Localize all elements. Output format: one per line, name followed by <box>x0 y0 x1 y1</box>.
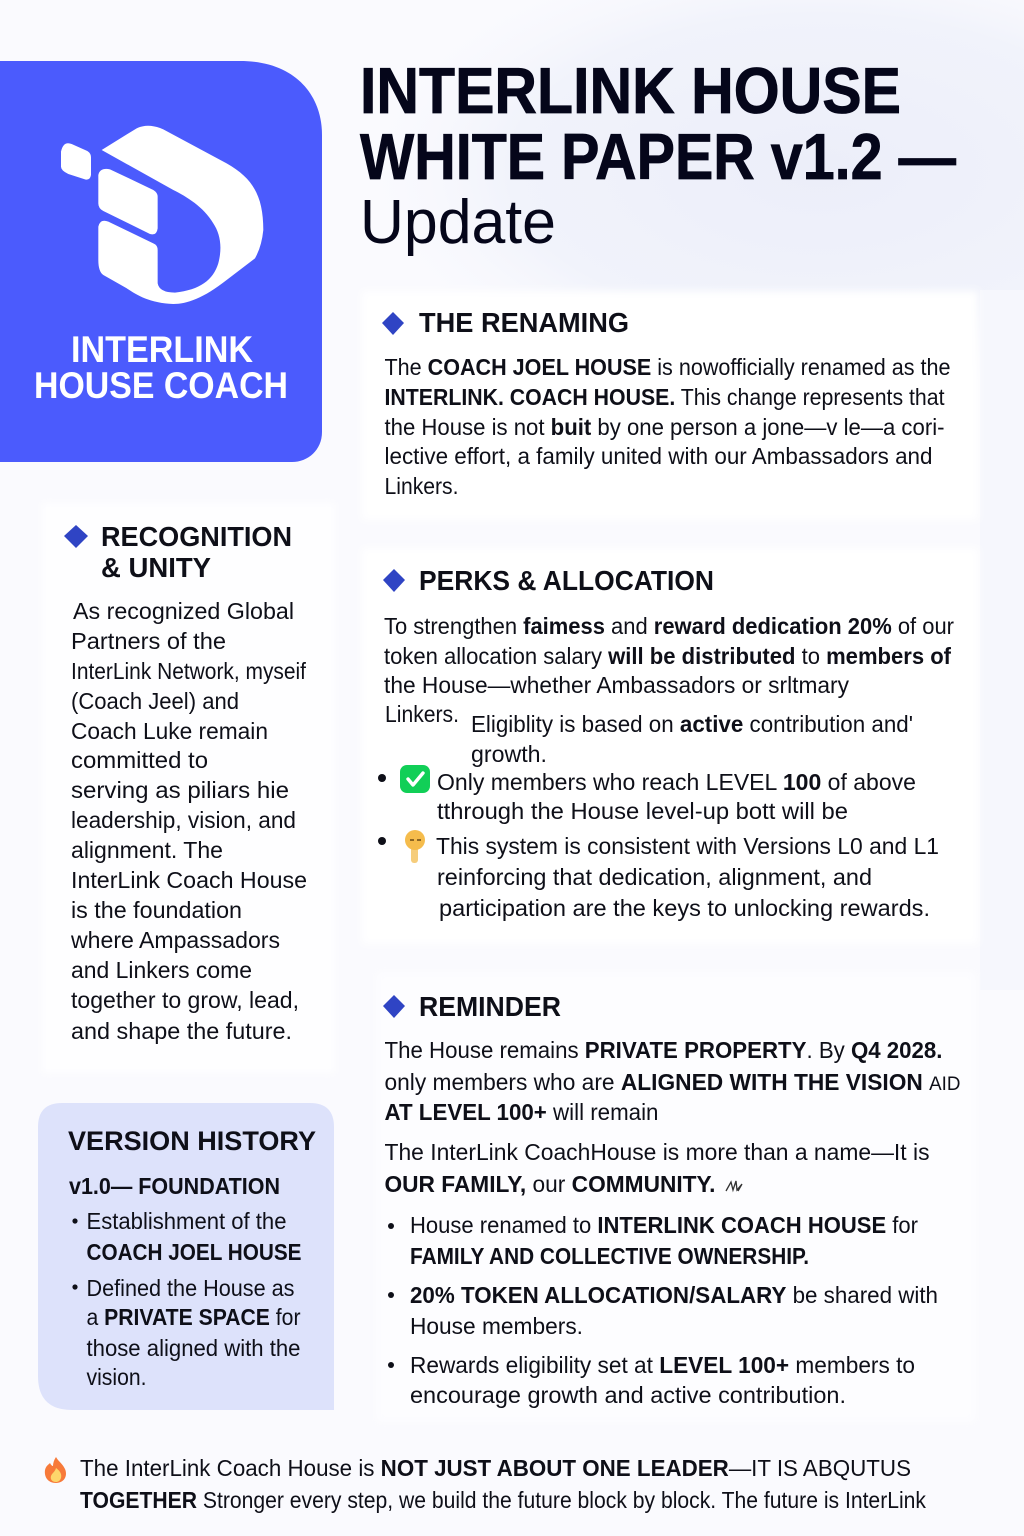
text: perks body: Linkers. <box>385 701 459 727</box>
footer callout <box>45 1455 926 1513</box>
list: version items: a PRIVATE SPACE for <box>86 1304 301 1330</box>
text: recognition body: together to grow, lead, <box>71 987 299 1013</box>
text: perks body: To strengthen faimess and reward dedication 20% of our <box>384 613 954 639</box>
icon: green check <box>400 765 430 793</box>
text: recognition body: (Coach Jeel) and <box>71 688 239 714</box>
icon: diamond bullet <box>383 995 405 1018</box>
text: recognition body <box>70 598 307 1044</box>
text: renaming body: lective effort, a family united with our Ambassadors and <box>384 443 932 469</box>
text: perks body: the House—whether Ambassadors or srltmary <box>384 672 849 698</box>
text: renaming body: The COACH JOEL HOUSE is nowofficially renamed as the <box>384 354 950 380</box>
list: version items: those aligned with the <box>86 1335 300 1361</box>
panel: the renaming background <box>362 291 978 520</box>
heading: version history: VERSION HISTORY <box>68 1126 316 1156</box>
panel: perks and allocation <box>378 565 954 921</box>
list: reminder summary: House renamed to INTERLINK COACH HOUSE for <box>410 1212 918 1238</box>
bullet: level 100 <box>378 765 916 824</box>
panel: recognition and unity <box>64 521 307 1044</box>
logo name: HOUSE COACH <box>34 365 288 406</box>
list: reminder summary: Rewards eligibility set at LEVEL 100+ members to <box>410 1352 915 1378</box>
text: reminder body: only members who are ALIGNED WITH THE VISION AID <box>384 1069 960 1095</box>
text: recognition body: committed to <box>71 747 208 773</box>
logo name: INTERLINK <box>71 329 253 370</box>
text: reminder body: The House remains PRIVATE PROPERTY. By Q4 2028. <box>384 1037 942 1063</box>
list: version items: Defined the House as <box>86 1275 294 1301</box>
text: reminder body: AT LEVEL 100+ will remain <box>384 1099 658 1125</box>
icon: key <box>405 830 425 863</box>
text: recognition body: As recognized Global <box>73 598 294 624</box>
text: reminder body: The InterLink CoachHouse is more than a name—It is <box>384 1139 930 1165</box>
text: recognition body: InterLink Coach House <box>71 867 307 893</box>
icon: diamond bullet <box>382 312 404 335</box>
list: reminder summary: encourage growth and active contribution. <box>410 1382 846 1408</box>
panel: reminder background <box>376 972 976 1422</box>
text: recognition body: alignment. The <box>71 837 223 863</box>
bullet: consistency: reinforcing that dedication, alignment, and <box>437 864 872 890</box>
text: perks body: growth. <box>471 741 547 767</box>
text: renaming body: the House is not buit by one person a jone—v le—a cori- <box>384 414 944 440</box>
heading: the renaming: THE RENAMING <box>419 307 629 338</box>
bullet: level 100: tthrough the House level-up bott will be <box>437 798 848 824</box>
panel: logo card <box>0 61 322 462</box>
text: recognition body: where Ampassadors <box>70 927 280 953</box>
text: recognition body: and shape the future. <box>71 1018 292 1044</box>
title: WHITE PAPER v1.2 — <box>360 120 956 193</box>
panel: version history <box>38 1103 334 1410</box>
heading: reminder: REMINDER <box>419 991 561 1022</box>
text: recognition body: InterLink Network, myseif <box>71 658 307 684</box>
bullet: consistency: participation are the keys to unlocking rewards. <box>439 895 930 921</box>
list: reminder summary: House members. <box>410 1313 583 1339</box>
title: Update <box>360 188 556 257</box>
list: reminder summary: 20% TOKEN ALLOCATION/SALARY be shared with <box>410 1282 938 1308</box>
panel: reminder <box>383 991 960 1408</box>
text: reminder body: OUR FAMILY, our COMMUNITY. <box>384 1171 716 1197</box>
text: recognition body: Partners of the <box>71 628 226 654</box>
subheading: v1.0 foundation: v1.0— FOUNDATION <box>69 1173 280 1199</box>
logo name <box>34 329 288 406</box>
panel: perks and allocation background <box>362 548 978 944</box>
text: perks body: Eligiblity is based on active contribution and' <box>471 711 913 737</box>
footer callout: The InterLink Coach House is NOT JUST ABOUT ONE LEADER—IT IS ABQUTUS <box>80 1455 911 1481</box>
list: version items: COACH JOEL HOUSE <box>86 1239 302 1265</box>
title <box>360 54 956 257</box>
text: recognition body: serving as piliars hie <box>71 777 289 803</box>
title: INTERLINK HOUSE <box>360 54 901 127</box>
text: recognition body: is the foundation <box>71 897 242 923</box>
text: renaming body <box>384 354 950 499</box>
icon: small squiggle <box>726 1181 742 1191</box>
heading: recognition and unity: & UNITY <box>101 552 211 583</box>
list: version items: vision. <box>86 1364 146 1390</box>
panel: the renaming <box>382 307 950 499</box>
bullet: consistency <box>378 830 939 921</box>
heading: perks and allocation: PERKS & ALLOCATION <box>419 565 714 596</box>
heading: recognition and unity: RECOGNITION <box>101 521 292 552</box>
text: perks body <box>384 613 954 767</box>
icon: flame <box>45 1457 66 1483</box>
text: recognition body: Coach Luke remain <box>71 718 268 744</box>
text: recognition body: and Linkers come <box>71 957 252 983</box>
text: recognition body: leadership, vision, and <box>71 807 296 833</box>
icon: interlink logo <box>61 126 263 304</box>
heading: recognition and unity <box>101 521 292 583</box>
bullet: level 100: Only members who reach LEVEL 100 of above <box>437 769 916 795</box>
icon: diamond bullet <box>383 569 405 592</box>
footer callout: TOGETHER Stronger every step, we build the future block by block. The future is InterLink <box>80 1487 926 1513</box>
icon: diamond bullet <box>64 525 88 548</box>
panel: recognition background <box>42 503 335 1073</box>
list: reminder summary <box>388 1212 938 1408</box>
text: perks body: token allocation salary will be distributed to members of <box>384 643 951 669</box>
list: version items <box>72 1208 302 1390</box>
text: renaming body: Linkers. <box>384 473 458 499</box>
list: reminder summary: FAMILY AND COLLECTIVE OWNERSHIP. <box>410 1243 809 1269</box>
bullet: consistency: This system is consistent with Versions L0 and L1 <box>436 833 939 859</box>
list: version items: Establishment of the <box>86 1208 286 1234</box>
text: reminder body <box>384 1037 960 1197</box>
text: renaming body: INTERLINK. COACH HOUSE. This change represents that <box>384 384 945 410</box>
